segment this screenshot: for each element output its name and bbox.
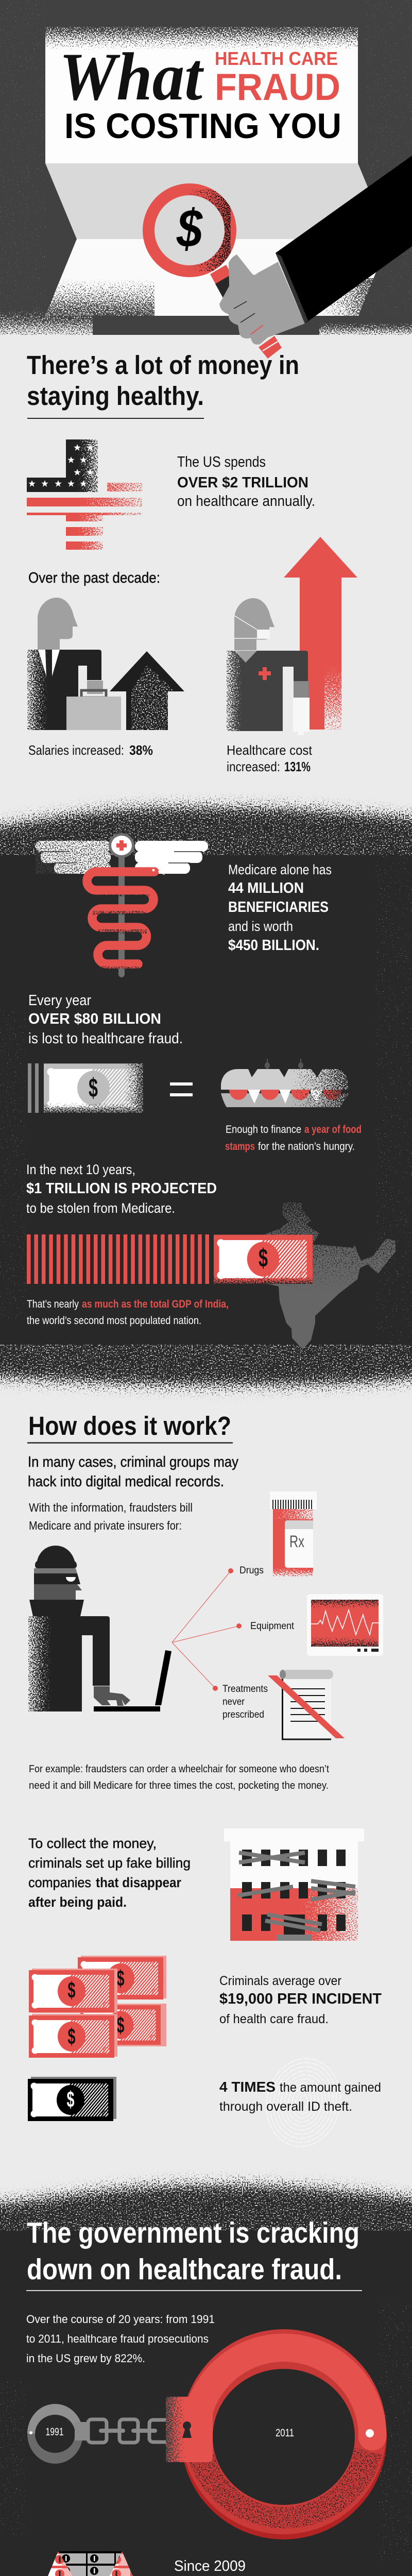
text: four times	[219, 2079, 381, 2114]
heading: how does it work: How does it work?	[28, 1411, 231, 1440]
icon: black bill	[28, 2077, 116, 2121]
text: fake billing companies: To collect the money,	[28, 1836, 157, 1851]
icon: map of India	[263, 1202, 396, 1349]
icon: stack of red bills: $	[68, 2024, 75, 2049]
icon: stack of red bills	[29, 1956, 166, 2058]
text: fraudsters bill	[29, 1501, 193, 1532]
text: medicare beneficiaries: BENEFICIARIES	[228, 899, 329, 916]
icon: fingerprint	[259, 2052, 348, 2154]
icon: magnifying glass: $	[176, 199, 203, 259]
label: equipment: Equipment	[250, 1621, 295, 1632]
callout: red connector lines	[172, 1568, 242, 1691]
text: recovered for medicare: Since 2009	[174, 2558, 246, 2574]
heading: there's a lot of money	[27, 350, 299, 419]
text: medicare beneficiaries	[228, 862, 332, 954]
text: medicare beneficiaries: Medicare alone has	[228, 862, 332, 877]
icon: sandwich	[221, 1059, 349, 1108]
text: US spends: The US spends	[177, 454, 266, 470]
text: fraudsters bill: With the information, fraudsters bill	[29, 1501, 193, 1514]
text: fraudsters bill: Medicare and private insurers for:	[29, 1519, 182, 1532]
text: medicare beneficiaries: $450 BILLION.	[228, 937, 319, 954]
icon: stack of red bills: $	[116, 1966, 125, 1991]
heading: government cracking down: The government is cracking	[27, 2216, 359, 2249]
icon: american flag	[27, 439, 143, 551]
heading: government cracking down: down on healthcare fraud.	[27, 2253, 342, 2286]
text: fake billing companies: after being paid.	[28, 1894, 127, 1910]
title: What	[59, 39, 204, 114]
text: next 10 years: $1 TRILLION IS PROJECTED	[26, 1180, 217, 1197]
text: wheelchair example: need it and bill Medicare for three times the cost, pocketing the money.	[29, 1780, 329, 1791]
label: treatments never prescribed	[222, 1684, 268, 1720]
text: GDP of India: That’s nearly	[27, 1298, 79, 1310]
text: food stamps: a year of food	[304, 1124, 362, 1136]
text: prosecutions growth: Over the course of 20 years: from 1991	[26, 2313, 215, 2326]
label: treatments never prescribed: never	[222, 1697, 245, 1707]
text: food stamps: for the nation’s hungry.	[258, 1141, 355, 1153]
heading: government cracking down	[26, 2216, 362, 2291]
text: four times: the amount gained	[280, 2080, 381, 2095]
text: per incident: $19,000 PER INCIDENT	[219, 1991, 382, 2007]
text: four times: 4 TIMES	[219, 2079, 276, 2095]
text: US spends: OVER $2 TRILLION	[177, 474, 308, 491]
text: US spends: on healthcare annually.	[177, 493, 315, 510]
icon: doctor with mask	[227, 598, 310, 735]
text: prosecutions growth: in the US grew by 822%.	[26, 2352, 145, 2365]
text: food stamps: Enough to finance	[226, 1124, 301, 1136]
text: four times: through overall ID theft.	[219, 2099, 352, 2114]
icon: magnifying glass	[148, 190, 248, 312]
heading: there's a lot of money: staying healthy.	[27, 381, 204, 411]
text: GDP of India: the world’s second most populated nation.	[27, 1315, 201, 1327]
text: every year	[28, 992, 183, 1047]
text: every year: OVER $80 BILLION	[28, 1011, 161, 1027]
icon: boarded-up building	[224, 1828, 364, 1941]
text: criminal groups: hack into digital medical records.	[28, 1473, 224, 1490]
panel: government dark section	[0, 2184, 412, 2576]
title: IS COSTING YOU	[64, 106, 341, 146]
folded paper sheet	[45, 26, 389, 316]
large cuff 2011	[166, 2329, 387, 2539]
icon: black bill: $	[67, 2087, 74, 2112]
text: every year: is lost to healthcare fraud.	[28, 1030, 183, 1047]
icon: heart monitor	[307, 1594, 383, 1656]
text: next 10 years: In the next 10 years,	[26, 1162, 135, 1177]
small cuff 1991	[27, 2404, 88, 2464]
text: medicare beneficiaries: and is worth	[228, 919, 293, 934]
text: US spends	[177, 454, 315, 510]
text: over the past decade: Over the past decade:	[28, 570, 160, 586]
label: treatments never prescribed: prescribed	[222, 1709, 264, 1720]
chart: stack of red bars with bill	[27, 1234, 313, 1284]
text: prosecutions growth	[26, 2313, 215, 2365]
text: fake billing companies: that disappear	[96, 1875, 181, 1890]
text: fake billing companies: companies	[28, 1875, 91, 1890]
text: wheelchair example: For example: fraudsters can order a wheelchair for someone who doesn’t	[29, 1764, 329, 1775]
text: criminal groups: In many cases, criminal groups may	[28, 1454, 238, 1470]
text: prosecutions growth: to 2011, healthcare fraud prosecutions	[26, 2332, 209, 2345]
text: fake billing companies: criminals set up fake billing	[28, 1855, 191, 1871]
chart: stack of red bars with bill: $	[259, 1244, 268, 1273]
icon: Rx pill bottle: Rx	[289, 1532, 304, 1551]
icon: gray dollar bill	[28, 1063, 143, 1113]
caption: healthcare cost increased: increased:	[227, 759, 280, 774]
text: criminal groups	[28, 1454, 238, 1490]
text: GDP of India: as much as the total GDP of India,	[82, 1298, 229, 1310]
title	[59, 39, 341, 146]
icon: equals sign	[170, 1082, 193, 1096]
text: food stamps: stamps	[225, 1141, 255, 1153]
label: treatments never prescribed: Treatments	[222, 1684, 268, 1694]
caption: salaries increased: 38%	[129, 742, 153, 758]
text: food stamps	[225, 1124, 362, 1153]
large cuff 2011: 2011	[276, 2427, 294, 2439]
caption: healthcare cost increased: Healthcare cost	[227, 742, 313, 758]
text: medicare beneficiaries: 44 MILLION	[228, 880, 304, 896]
icon: stack of red bills: $	[68, 1978, 75, 2003]
chain	[88, 2419, 170, 2443]
panel: hero header	[0, 0, 412, 359]
small cuff 1991: 1991	[45, 2426, 64, 2438]
icon: stack of red bills: $	[116, 2013, 125, 2038]
text: per incident: of health care fraud.	[219, 2012, 329, 2026]
icon: gray dollar bill: $	[89, 1073, 98, 1103]
heading: there's a lot of money: There’s a lot of money in	[27, 350, 299, 380]
icon: red arrow	[284, 537, 357, 730]
text: next 10 years: to be stolen from Medicare.	[26, 1200, 175, 1216]
icon: awareness ribbon of bills	[45, 2551, 135, 2576]
title: FRAUD	[215, 66, 340, 108]
caption: healthcare cost increased	[227, 742, 313, 774]
icon: crossed-out prescription	[268, 1670, 345, 1739]
icon: gloved hand and sleeve	[219, 156, 412, 359]
icon: caduceus	[36, 833, 208, 977]
text: GDP of India	[27, 1298, 229, 1327]
text: next 10 years	[26, 1162, 217, 1216]
label: drugs: Drugs	[239, 1565, 264, 1576]
caption: healthcare cost increased: 131%	[284, 759, 311, 774]
icon: businessman with briefcase	[27, 598, 184, 730]
text: wheelchair example	[29, 1764, 329, 1791]
text: every year: Every year	[28, 992, 91, 1009]
icon: handcuffs 1991 vs 2011	[27, 2329, 387, 2539]
text: per incident	[219, 1974, 382, 2026]
caption: salaries increased: Salaries increased:	[28, 742, 124, 758]
text: per incident: Criminals average over	[219, 1974, 341, 1988]
panel: medicare dark section	[0, 807, 412, 1386]
icon: Rx pill bottle	[270, 1492, 317, 1577]
title: HEALTH CARE	[215, 48, 338, 69]
icon: masked thief at laptop	[28, 1546, 171, 1711]
text: fake billing companies	[28, 1836, 191, 1910]
